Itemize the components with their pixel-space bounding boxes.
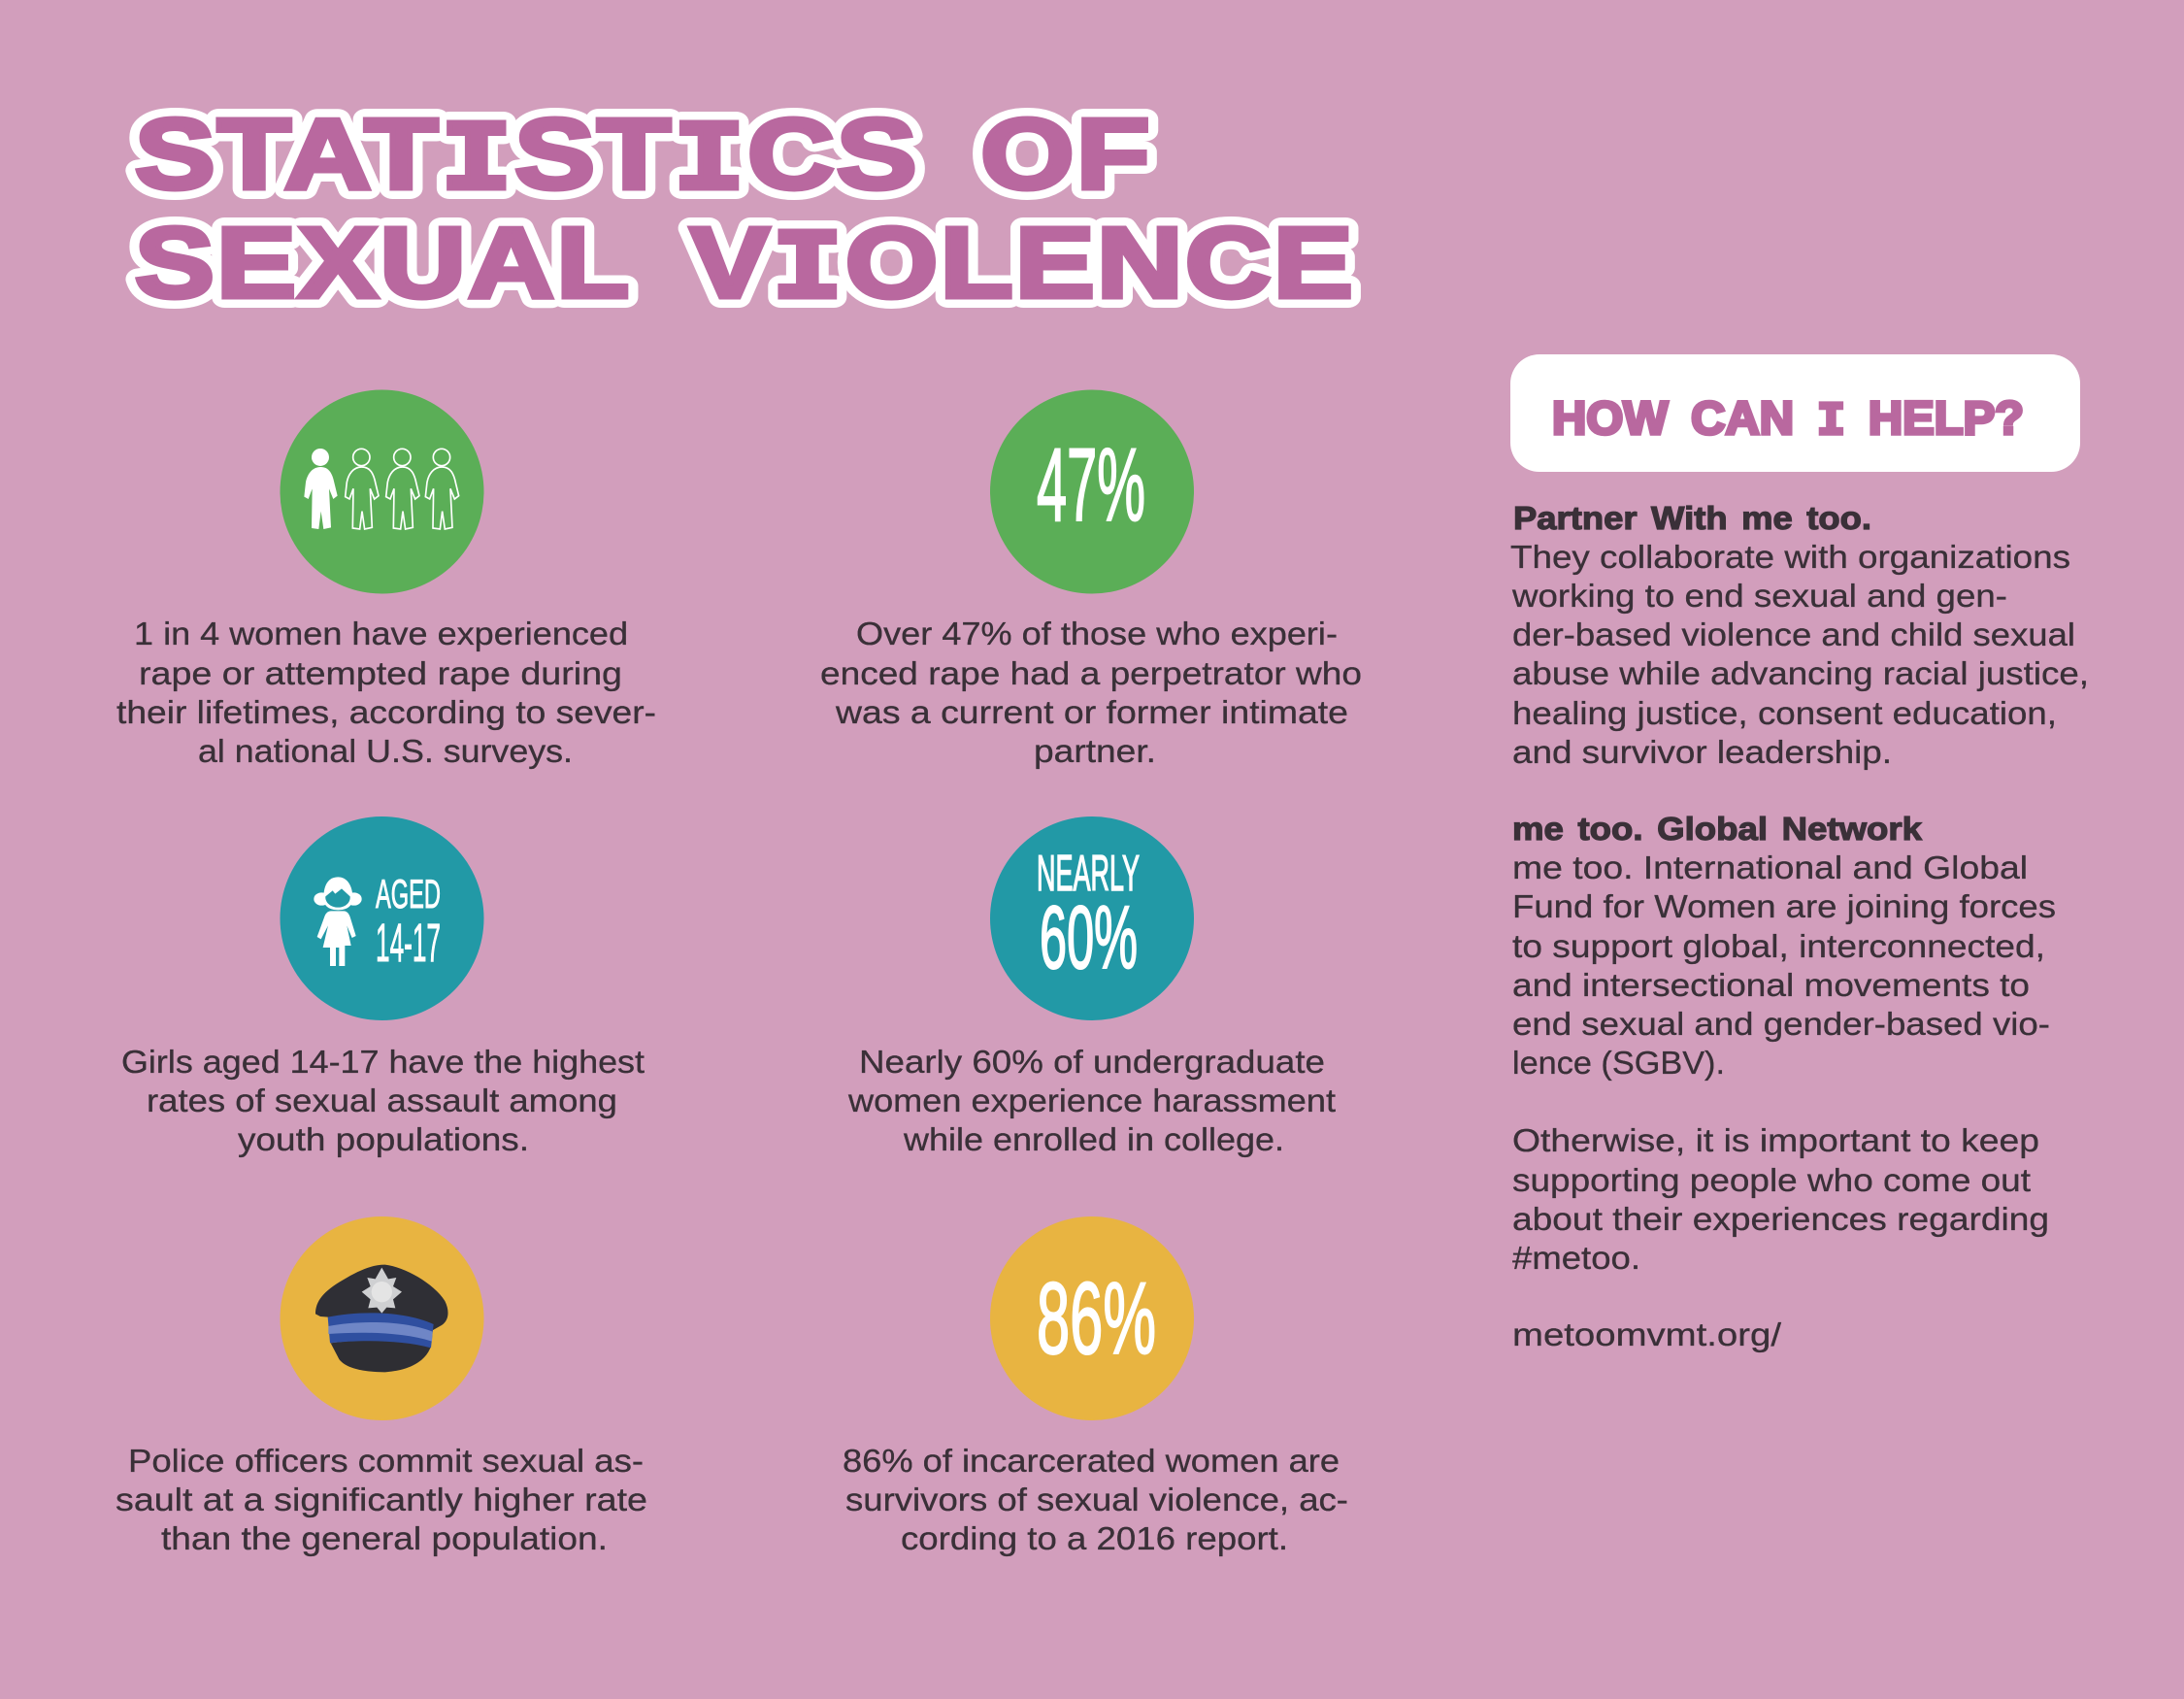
text block: me too global network: Fund for Women are joining forces bbox=[1512, 888, 2056, 924]
icon: 86% circle: 86% bbox=[1037, 1262, 1156, 1376]
text: nearly 60%: while enrolled in college. bbox=[903, 1121, 1284, 1157]
text: girls aged 14-17: youth populations. bbox=[238, 1121, 529, 1157]
text block: me too global network: to support global, interconnected, bbox=[1512, 928, 2045, 964]
title: STAT IST ICS OF bbox=[135, 98, 1152, 218]
text: 47%: enced rape had a perpetrator who bbox=[820, 655, 1362, 691]
title: SEXUAL V IOLENCE bbox=[135, 207, 1355, 327]
text: police officers bbox=[116, 1443, 647, 1556]
icon: police hat bbox=[280, 1216, 483, 1420]
text block: me too global network bbox=[1512, 811, 2056, 1081]
text: nearly 60%: women experience harassment bbox=[847, 1083, 1336, 1118]
icon: 47% circle bbox=[990, 390, 1194, 594]
icon: nearly 60% circle bbox=[990, 816, 1194, 1020]
title: STAT IST ICS OF bbox=[135, 98, 1152, 218]
panel: stat 1 in 4 women bbox=[116, 390, 656, 769]
text block: keep supporting people: #metoo. bbox=[1512, 1240, 1640, 1276]
text: website link: metoomvmt.org/ bbox=[1512, 1316, 1782, 1352]
text block: partner with me too: and survivor leadership. bbox=[1512, 734, 1892, 770]
panel: stat nearly 60% bbox=[847, 816, 1336, 1157]
text: 1 in 4 women: al national U.S. surveys. bbox=[198, 733, 573, 769]
icon: nearly 60% circle: 60% bbox=[1040, 888, 1138, 987]
panel: stat 47% bbox=[820, 390, 1362, 769]
text: police officers: sault at a significantly higher rate bbox=[116, 1482, 647, 1517]
text: nearly 60%: Nearly 60% of undergraduate bbox=[859, 1044, 1325, 1080]
heading card: how can I help: HOW CAN I HELP? bbox=[1552, 393, 2024, 449]
icon: nearly 60% circle: NEARLY bbox=[1037, 846, 1140, 902]
text block: partner with me too: working to end sexual and gen- bbox=[1511, 578, 2007, 614]
icon: 86% circle bbox=[990, 1216, 1194, 1420]
text: 86%: cording to a 2016 report. bbox=[901, 1520, 1288, 1556]
text: 86%: 86% of incarcerated women are bbox=[843, 1443, 1340, 1479]
text: 1 in 4 women: rape or attempted rape during bbox=[139, 655, 622, 691]
text: 47%: was a current or former intimate bbox=[835, 694, 1348, 730]
text: 47% bbox=[820, 616, 1362, 769]
text: nearly 60% bbox=[847, 1044, 1336, 1157]
text block: keep supporting people: supporting people who come out bbox=[1512, 1162, 2031, 1198]
icon: four people, one filled bbox=[280, 390, 483, 594]
text block: partner with me too: healing justice, consent education, bbox=[1512, 695, 2057, 731]
text block: partner with me too: They collaborate with organizations bbox=[1510, 539, 2070, 575]
heading card: how can I help bbox=[1510, 354, 2080, 472]
title bbox=[135, 98, 1355, 327]
text: police officers: than the general population. bbox=[161, 1520, 608, 1556]
text block: partner with me too: abuse while advancing racial justice, bbox=[1512, 655, 2089, 691]
title: SEXUAL V IOLENCE bbox=[135, 207, 1355, 327]
text: 1 in 4 women bbox=[116, 616, 656, 769]
text block: me too global network: end sexual and gender-based vio- bbox=[1512, 1006, 2050, 1042]
panel: stat police officers bbox=[116, 1216, 647, 1556]
text block: me too global network: me too. International and Global bbox=[1512, 850, 2028, 885]
text block: keep supporting people: Otherwise, it is important to keep bbox=[1512, 1122, 2039, 1158]
text: 1 in 4 women: 1 in 4 women have experienced bbox=[134, 616, 628, 651]
panel: stat girls aged 14-17 bbox=[121, 816, 645, 1157]
text: police officers: Police officers commit sexual as- bbox=[128, 1443, 644, 1479]
text block: me too global network: lence (SGBV). bbox=[1512, 1045, 1725, 1081]
text: girls aged 14-17: rates of sexual assault among bbox=[147, 1083, 617, 1118]
text: 86%: survivors of sexual violence, ac- bbox=[845, 1482, 1348, 1517]
text: girls aged 14-17: Girls aged 14-17 have the highest bbox=[121, 1044, 645, 1080]
text: 86% bbox=[843, 1443, 1348, 1556]
text block: keep supporting people: about their experiences regarding bbox=[1512, 1201, 2049, 1237]
text block: keep supporting people bbox=[1512, 1122, 2049, 1276]
text block: partner with me too: der-based violence and child sexual bbox=[1512, 616, 2075, 652]
text block: me too global network: and intersectional movements to bbox=[1512, 967, 2030, 1003]
icon: girl aged 14-17: AGED bbox=[376, 871, 441, 916]
icon: girl aged 14-17: 14-17 bbox=[376, 912, 441, 973]
text block: partner with me too bbox=[1510, 500, 2089, 770]
text block: me too global network: me too. Global Network bbox=[1512, 811, 1923, 847]
text: 1 in 4 women: their lifetimes, according to sever- bbox=[116, 694, 656, 730]
text: 47%: partner. bbox=[1034, 733, 1156, 769]
panel: stat 86% bbox=[843, 1216, 1348, 1556]
icon: 47% circle: 47% bbox=[1037, 426, 1145, 543]
text: girls aged 14-17 bbox=[121, 1044, 645, 1157]
text: 47%: Over 47% of those who experi- bbox=[856, 616, 1338, 651]
text block: partner with me too: Partner With me too. bbox=[1513, 500, 1871, 536]
icon: girl aged 14-17 bbox=[280, 816, 483, 1020]
